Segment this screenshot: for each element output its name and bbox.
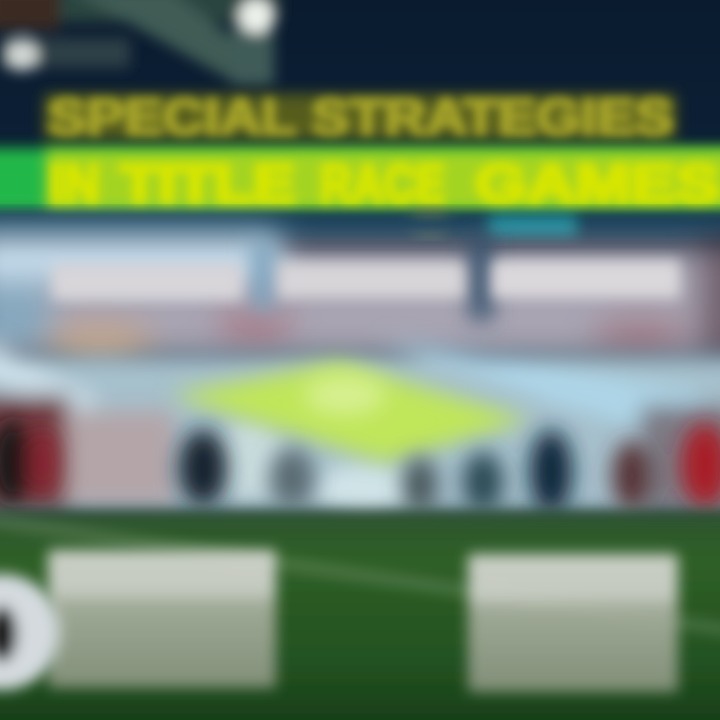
- dark teal strip below the title: [0, 212, 720, 238]
- silhouette 5: [530, 430, 572, 514]
- stand panel: right: [492, 260, 680, 298]
- upper stands: [0, 232, 720, 369]
- title band: bright green: GAMES: [475, 154, 720, 214]
- silhouette 2: [270, 448, 314, 508]
- title band: bright green: TITLE: [120, 154, 295, 214]
- stand panel: centre: [278, 262, 464, 298]
- title line one: SPECIAL STRATEGIES: [48, 89, 673, 145]
- card: bottom right: [468, 554, 678, 692]
- silhouette 7: red: [681, 423, 720, 507]
- silhouette 3: [403, 457, 437, 513]
- pitch highlight: [305, 375, 385, 415]
- card: bottom left: [48, 550, 276, 688]
- spectators silhouettes: [0, 420, 720, 514]
- pitch line: [0, 515, 720, 635]
- stand panel: left: [52, 264, 242, 300]
- background: night sky: [0, 0, 720, 240]
- floodlight structure: [0, 0, 280, 85]
- silhouette 1: [179, 430, 227, 506]
- pitch: [170, 362, 530, 462]
- title band: bright green: [0, 148, 720, 234]
- stand pillars: [252, 235, 492, 320]
- lower stand: [0, 335, 720, 516]
- silhouette 6: [612, 441, 652, 511]
- grass foreground: [0, 512, 720, 720]
- silhouette 9: far left red: [29, 427, 59, 497]
- icon: soccer ball: [0, 574, 60, 690]
- title band: bright green: IN: [50, 154, 100, 214]
- silhouette 4: [463, 452, 503, 512]
- silhouette 8: far left: [0, 420, 32, 504]
- title band: bright green: RACE: [320, 154, 445, 214]
